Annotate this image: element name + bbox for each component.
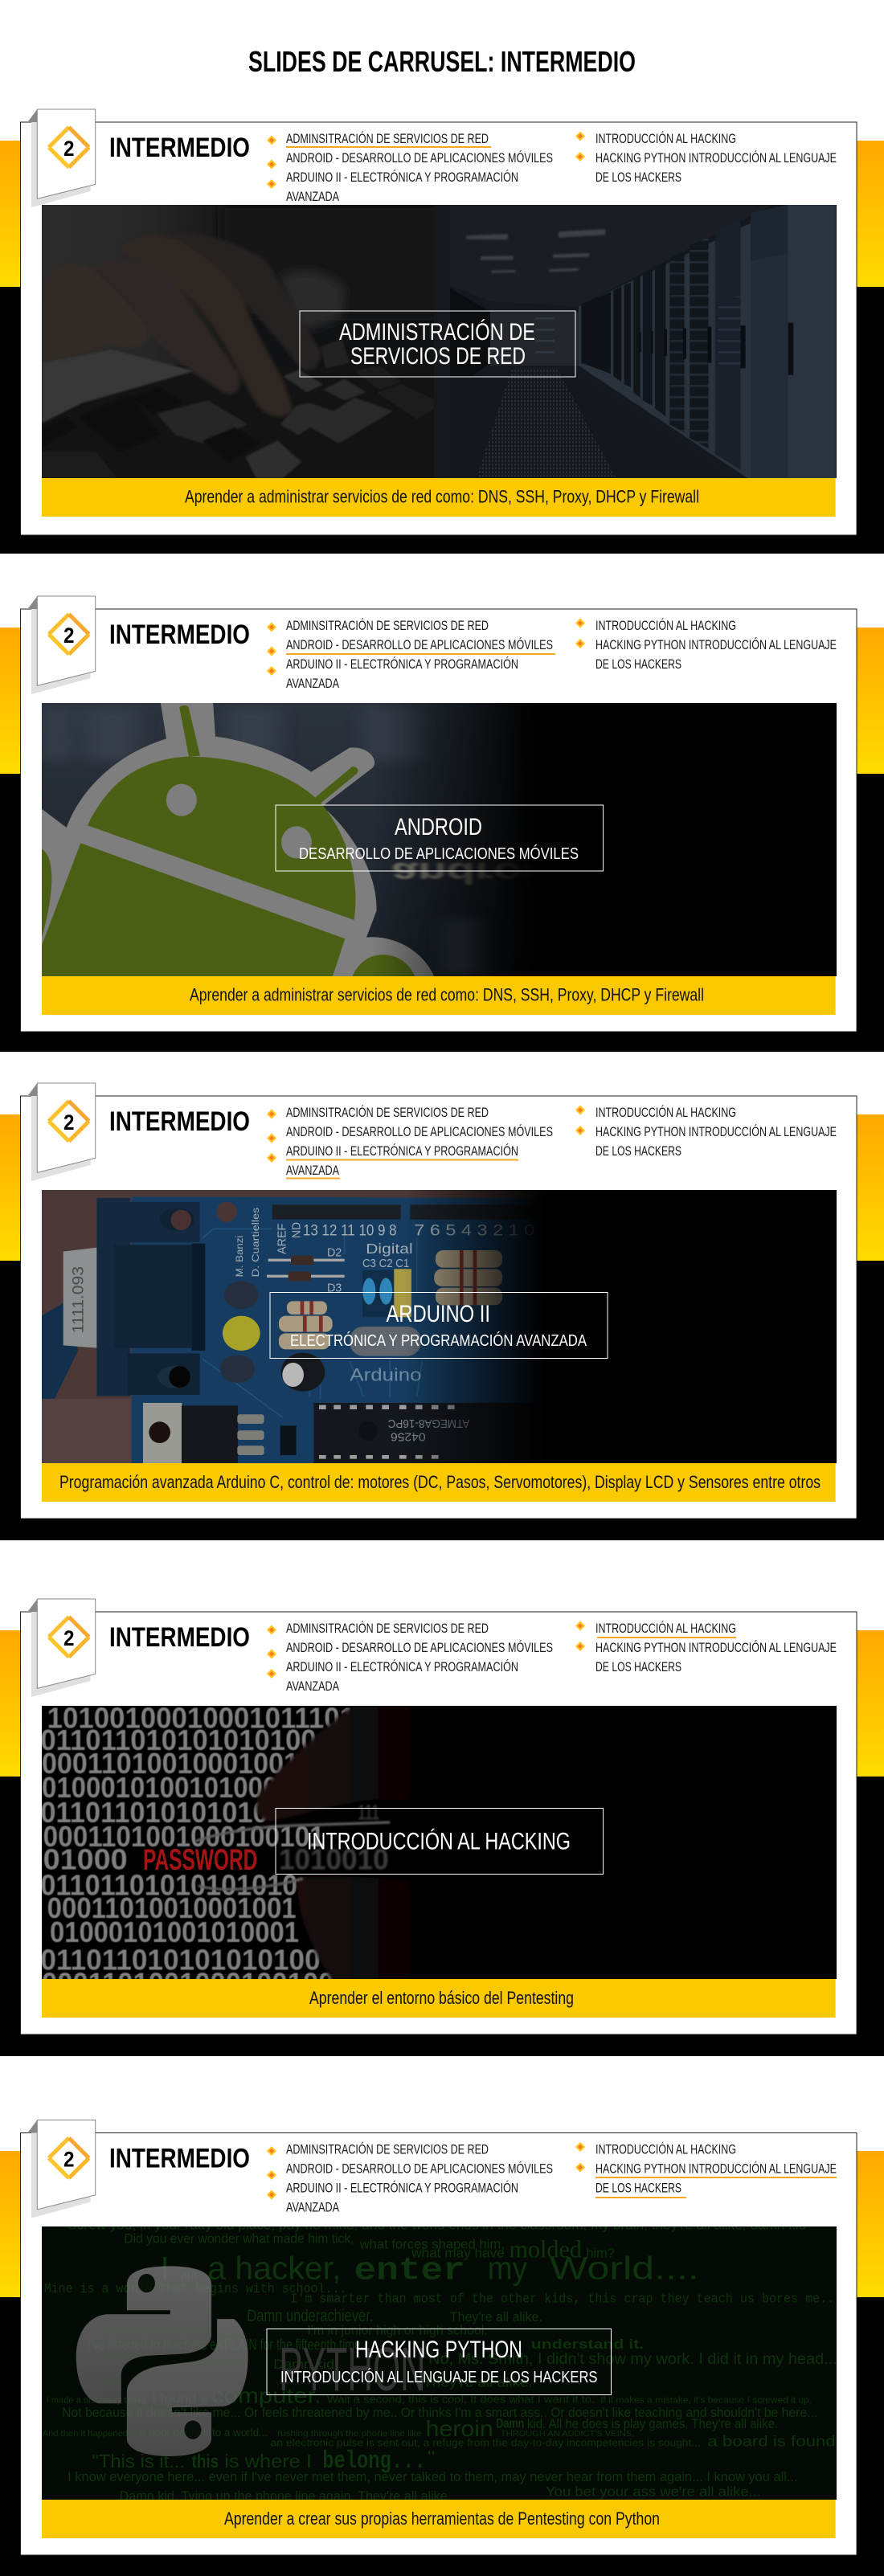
blue capacitors and yellow capacitor xyxy=(362,1270,394,1318)
course list right column: INTRODUCCIÓN AL HACKING xyxy=(595,618,736,633)
course list left column xyxy=(267,131,553,204)
panel: slide 1 administración de servicios de red xyxy=(0,109,884,554)
crystal xyxy=(350,1327,421,1356)
course list left column: AVANZADA xyxy=(286,189,339,204)
icon: level 2 folded tab: 2 xyxy=(63,624,74,648)
icon: level 2 folded tab: 2 xyxy=(63,1110,74,1135)
binary rows xyxy=(42,1707,350,1979)
course list left column: ANDROID - DESARROLLO DE APLICACIONES MÓVILES xyxy=(286,150,553,166)
course list right column xyxy=(575,131,837,185)
board labels xyxy=(234,1208,534,1295)
image: android robot xyxy=(42,703,837,976)
icon: level 2 folded tab: 2 xyxy=(63,137,74,161)
course list left column xyxy=(267,1621,553,1694)
course list left column: ANDROID - DESARROLLO DE APLICACIONES MÓVILES xyxy=(286,1640,553,1655)
image: binary digits and tweezers holding password: 111 xyxy=(358,1801,379,1825)
board labels: ND xyxy=(291,1222,304,1238)
icon: level 2 folded tab xyxy=(27,1599,96,1697)
course list left column: ADMINSITRACIÓN DE SERVICIOS DE RED xyxy=(286,2142,489,2157)
board labels: AREF xyxy=(276,1224,289,1254)
diodes xyxy=(267,1260,345,1276)
password label: PASSWORD xyxy=(143,1842,257,1876)
course list left column: ANDROID - DESARROLLO DE APLICACIONES MÓVILES xyxy=(286,637,553,652)
caption bar: slide 1 xyxy=(42,478,836,517)
white card xyxy=(21,1096,857,1519)
course list left column xyxy=(267,1105,553,1180)
caption bar: slide 2 xyxy=(42,976,836,1015)
manifesto green text: a door opened to a world... xyxy=(140,2427,268,2439)
header: level tab and course list xyxy=(27,109,837,207)
caption bar: slide 4: Aprender el entorno básico del Pentesting xyxy=(309,1988,574,2008)
callout box: slide 2 title: ANDROID xyxy=(395,814,482,840)
board labels: 7 6 5 4 3 2 1 0 xyxy=(414,1223,534,1240)
course list right column xyxy=(575,1105,837,1159)
header pins xyxy=(272,1204,401,1220)
manifesto green text: Damn underachiever. xyxy=(247,2307,373,2325)
course list left column: ADMINSITRACIÓN DE SERVICIOS DE RED xyxy=(286,618,489,633)
manifesto green text: I xyxy=(161,2251,169,2286)
course list right column: DE LOS HACKERS xyxy=(595,1143,681,1159)
header: level tab and course list xyxy=(27,596,837,694)
image: hacker manifesto text and python logo: PYTHON xyxy=(279,2334,426,2404)
background band: yellow and black xyxy=(0,2151,884,2576)
course list left column: AVANZADA xyxy=(286,2200,339,2214)
manifesto green text: Damn xyxy=(496,2415,524,2431)
manifesto green text: heroin xyxy=(426,2416,493,2441)
server room side xyxy=(434,205,838,478)
tweezers xyxy=(196,1822,390,1889)
course list left column xyxy=(267,618,555,691)
manifesto green text: World.... xyxy=(550,2251,699,2286)
image: arduino board: Arduino xyxy=(350,1364,422,1384)
manifesto green text: I've listened to teachers eXPLAIN for the fifteenth time xyxy=(88,2336,361,2353)
manifesto green text: understand it. xyxy=(531,2337,644,2352)
manifesto green text xyxy=(43,2218,837,2504)
manifesto green text: rushing through the phone line like xyxy=(277,2429,422,2439)
callout box: slide 5 title xyxy=(267,2329,611,2394)
image: arduino board xyxy=(42,1190,837,1463)
robot silhouette grey outline xyxy=(42,703,434,976)
caption bar: slide 3 xyxy=(42,1463,836,1502)
white card xyxy=(21,609,857,1032)
course list right column: DE LOS HACKERS xyxy=(595,1659,681,1674)
course list right column: INTRODUCCIÓN AL HACKING xyxy=(595,131,736,146)
course list right column: DE LOS HACKERS xyxy=(595,170,681,185)
background band: yellow and black xyxy=(0,628,884,1052)
manifesto green text: They're all alike. xyxy=(450,2309,542,2325)
image: hacker manifesto text and python logo xyxy=(42,2218,837,2504)
caption bar: slide 5: Aprender a crear sus propias herramientas de Pentesting con Python xyxy=(224,2509,660,2529)
icon: level 2 folded tab: 2 xyxy=(63,2147,74,2171)
panel: slide 3 arduino xyxy=(0,1083,884,1540)
manifesto green text: Damn kid. xyxy=(273,2357,338,2372)
manifesto green text: molded xyxy=(509,2236,582,2263)
board labels: C3 C2 C1 xyxy=(362,1257,409,1270)
panel: slide 4 introducción al hacking xyxy=(0,1599,884,2056)
icon: level 2 folded tab xyxy=(27,1083,96,1181)
robot green body xyxy=(42,843,345,976)
binary rows: 10100100010001011101 xyxy=(47,1701,355,1734)
course list left column: ARDUINO II - ELECTRÓNICA Y PROGRAMACIÓN xyxy=(286,1143,518,1159)
background band: yellow and black xyxy=(0,141,884,554)
callout box: slide 4 title: INTRODUCCIÓN AL HACKING xyxy=(307,1829,571,1854)
board labels: Digital xyxy=(366,1241,413,1257)
white card xyxy=(21,1612,857,2034)
callout box: slide 3 title: ARDUINO II xyxy=(386,1301,490,1327)
callout box: slide 4 title xyxy=(276,1808,604,1874)
manifesto green text: They're all alike. xyxy=(423,2374,533,2390)
manifesto green text: I made a discovery today. xyxy=(47,2396,148,2405)
manifesto green text: Mine is a world that begins with school... xyxy=(44,2282,346,2297)
course list left column: AVANZADA xyxy=(286,1678,339,1694)
title: SLIDES DE CARRUSEL: INTERMEDIO xyxy=(248,45,636,78)
course list left column: AVANZADA xyxy=(286,676,339,691)
header: level tab and course list xyxy=(27,1083,837,1181)
course list right column xyxy=(575,618,837,672)
chip xyxy=(313,1403,536,1463)
image: arduino board: 1111.093 xyxy=(71,1266,88,1333)
image: arduino board: 04256 xyxy=(391,1430,426,1443)
callout box: slide 5 title: INTRODUCCIÓN AL LENGUAJE DE LOS HACKERS xyxy=(280,2368,598,2386)
transistors led and capacitor xyxy=(224,1281,259,1309)
manifesto green text: my xyxy=(488,2251,527,2286)
course list left column: ARDUINO II - ELECTRÓNICA Y PROGRAMACIÓN xyxy=(286,170,518,185)
course list right column: INTRODUCCIÓN AL HACKING xyxy=(595,1621,736,1636)
hand and keyboard side xyxy=(42,205,215,366)
callout box: slide 2 title xyxy=(276,805,604,871)
course list right column xyxy=(575,1621,837,1674)
background band: yellow and black xyxy=(0,1630,884,2056)
course list left column: ARDUINO II - ELECTRÓNICA Y PROGRAMACIÓN xyxy=(286,1659,518,1674)
resistors xyxy=(279,1250,502,1349)
robot foot xyxy=(352,955,415,976)
board labels: D3 xyxy=(327,1282,342,1295)
panel: slide 5 hacking python xyxy=(0,2120,884,2576)
binary rows: 0001101001000100100 xyxy=(42,1966,334,1999)
binary rows: 01000 xyxy=(43,1842,128,1875)
manifesto green text: this xyxy=(192,2451,219,2472)
callout box: slide 3 title: ELECTRÓNICA Y PROGRAMACIÓN AVANZADA xyxy=(290,1331,587,1350)
panel: slide 2 android xyxy=(0,596,884,1052)
manifesto green text: "This is it... xyxy=(92,2451,185,2472)
course list left column: ANDROID - DESARROLLO DE APLICACIONES MÓVILES xyxy=(286,1124,553,1139)
fingers xyxy=(254,1706,409,1979)
manifesto green text: what forces shaped him, xyxy=(359,2237,505,2252)
background band: yellow and black xyxy=(0,1114,884,1540)
course list right column xyxy=(575,2142,837,2198)
callout box: slide 1 title: ADMINISTRACIÓN DE xyxy=(339,319,535,346)
serial connector xyxy=(96,1198,130,1396)
manifesto green text: I found a xyxy=(152,2390,209,2406)
manifesto green text: belong... xyxy=(322,2447,426,2475)
course list right column: INTRODUCCIÓN AL HACKING xyxy=(595,2142,736,2157)
binary rows: 0001101001000100101 xyxy=(43,1820,325,1853)
level heading: INTERMEDIO xyxy=(109,2144,250,2174)
board labels: D. Cuartielles xyxy=(250,1208,261,1277)
binary rows: 011011010101010100 xyxy=(40,1723,317,1756)
icon: level 2 folded tab xyxy=(27,109,96,207)
image: arduino board: ATMEGA8-16PC xyxy=(387,1417,469,1429)
course list right column: INTRODUCCIÓN AL HACKING xyxy=(595,1105,736,1120)
icon: level 2 folded tab xyxy=(27,596,96,694)
manifesto green text: Wait a second, this is cool. It does what I want it to. xyxy=(327,2394,595,2406)
manifesto green text: what may have xyxy=(411,2246,505,2261)
manifesto green text: computer. xyxy=(211,2384,321,2408)
callout box: slide 3 title xyxy=(270,1292,608,1358)
binary rows: 011011010101010100 xyxy=(40,1943,321,1976)
course list left column: ANDROID - DESARROLLO DE APLICACIONES MÓVILES xyxy=(286,2161,553,2176)
board labels: 13 12 11 10 9 8 xyxy=(303,1223,397,1240)
caption bar: slide 4 xyxy=(42,1979,836,2018)
level heading: INTERMEDIO xyxy=(109,1106,250,1137)
manifesto green text: " xyxy=(428,2447,436,2465)
circuit board xyxy=(132,1196,542,1463)
binary rows: 00011010010001001 xyxy=(42,1747,299,1780)
header: level tab and course list xyxy=(27,1599,837,1697)
manifesto green text: enter xyxy=(354,2252,465,2289)
course list right column: DE LOS HACKERS xyxy=(595,2181,681,2195)
course list left column: ADMINSITRACIÓN DE SERVICIOS DE RED xyxy=(286,1105,489,1120)
callout box: slide 1 title xyxy=(300,311,575,377)
manifesto green text: Damn kid. Tying up the phone line again. They're all alike. xyxy=(120,2488,451,2504)
course list left column: ARDUINO II - ELECTRÓNICA Y PROGRAMACIÓN xyxy=(286,656,518,672)
binary rows: 0100010100101000 xyxy=(42,1771,277,1804)
course list left column: AVANZADA xyxy=(286,1163,339,1178)
icon: level 2 folded tab: 2 xyxy=(63,1626,74,1650)
white card xyxy=(21,122,857,535)
manifesto green text: him? xyxy=(587,2246,615,2261)
manifesto green text: And then it happened... xyxy=(43,2429,135,2439)
binary rows: 01101101010101010 xyxy=(40,1869,297,1902)
icon: python logo xyxy=(76,2266,248,2456)
course list right column: DE LOS HACKERS xyxy=(595,656,681,672)
caption bar: slide 5 xyxy=(42,2500,836,2538)
manifesto green text: am xyxy=(180,2267,198,2283)
robot antennas xyxy=(179,705,200,757)
image: binary digits and tweezers holding password: 1010010 xyxy=(279,1842,389,1875)
level heading: INTERMEDIO xyxy=(109,133,250,163)
image: binary digits and tweezers holding password xyxy=(40,1698,837,1999)
board labels: M. Banzi xyxy=(234,1236,245,1277)
manifesto green text: a hacker, xyxy=(207,2251,341,2286)
robot arm edge xyxy=(42,849,51,938)
manifesto green text: THROUGH AN ADDICT'S VEINS, xyxy=(501,2430,634,2439)
header: level tab and course list xyxy=(27,2120,837,2218)
caption bar: slide 1: Aprender a administrar servicios de red como: DNS, SSH, Proxy, DHCP y Firewall xyxy=(185,487,699,506)
voltage regulator xyxy=(143,1403,182,1463)
icon: level 2 folded tab xyxy=(27,2120,96,2218)
callout box: slide 1 title: SERVICIOS DE RED xyxy=(350,343,526,370)
course list left column: ADMINSITRACIÓN DE SERVICIOS DE RED xyxy=(286,131,489,146)
mirrored reflection logo text: android xyxy=(392,857,563,889)
course list left column: ARDUINO II - ELECTRÓNICA Y PROGRAMACIÓN xyxy=(286,2181,518,2195)
course list left column: ADMINSITRACIÓN DE SERVICIOS DE RED xyxy=(286,1621,489,1636)
binary rows: 01000101001010001 xyxy=(50,1916,299,1948)
level heading: INTERMEDIO xyxy=(109,1622,250,1653)
white card xyxy=(21,2132,857,2555)
binary rows: 011011010101010 xyxy=(40,1796,268,1829)
callout box: slide 5 title: HACKING PYTHON xyxy=(355,2337,522,2363)
hand background xyxy=(42,1190,550,1463)
level heading: INTERMEDIO xyxy=(109,619,250,650)
callout box: slide 2 title: DESARROLLO DE APLICACIONES MÓVILES xyxy=(299,844,579,863)
caption bar: slide 2: Aprender a administrar servicios de red como: DNS, SSH, Proxy, DHCP y Firewall xyxy=(190,985,704,1004)
manifesto green text: I'm in junior high or high school. xyxy=(307,2322,488,2338)
manifesto green text: is where I xyxy=(224,2451,312,2472)
board labels: D2 xyxy=(327,1247,342,1260)
course list left column xyxy=(267,2142,553,2214)
robot green head xyxy=(88,757,355,920)
binary rows: 00011010010001001 xyxy=(47,1891,297,1924)
manifesto green text: Did you ever wonder what made him tick, xyxy=(124,2230,354,2246)
robot eyes xyxy=(166,784,197,816)
image: hand on keyboard and server room xyxy=(42,205,838,478)
